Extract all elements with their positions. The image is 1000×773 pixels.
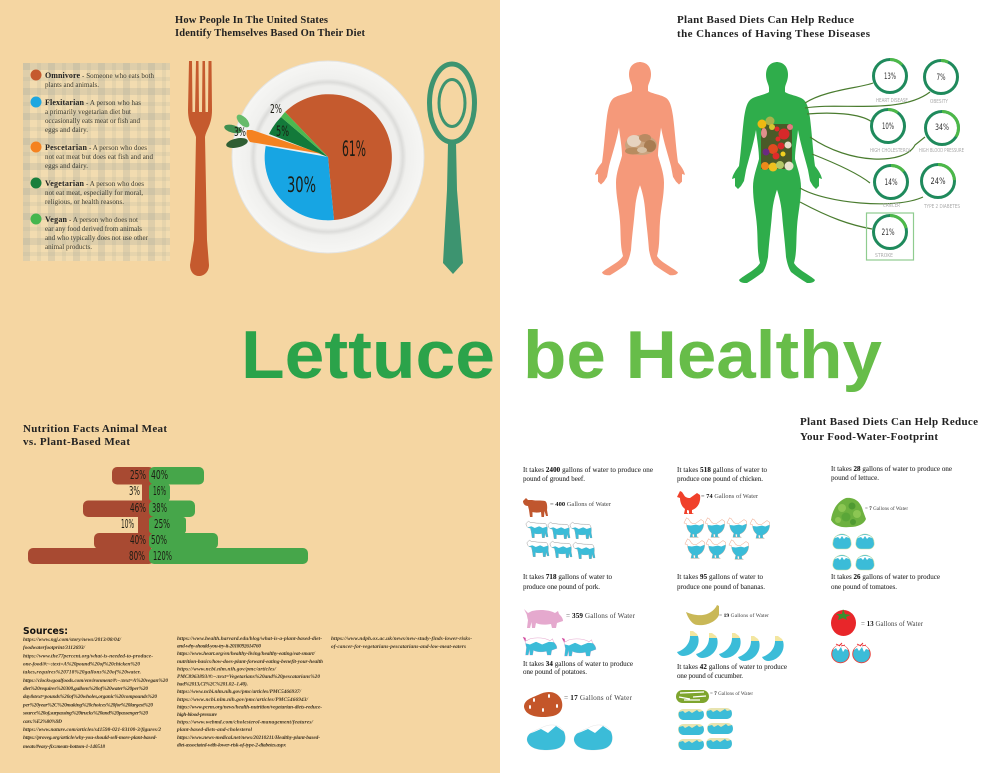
panel: diet legend: religious, or health reasons. [45,198,124,206]
block: tomato water use: one pound of tomatoes. [831,583,897,591]
block: pork water use: produce one pound of pork. [523,583,600,591]
figure: green plant-eating body [732,62,822,283]
sources column 2: https://www.pcrm.org/news/health-nutrition/vegetarian-diets-reduce- [177,704,322,710]
panel: diet legend: - A person who does [89,144,147,152]
heading: water footprint [800,416,978,443]
sources column 2: https://www.health.harvard.edu/blog/what-is-a-plant-based-diet- [177,636,322,642]
block: pork water use: It takes 718 gallons of water to [523,573,612,581]
block: potato water use: It takes 34 gallons of water to produce [523,660,633,668]
bar chart: nutrition comparison: 120% [153,549,172,563]
heading: diet identification: How People In The United States [175,15,328,26]
heading: diet identification: Identify Themselves Based On Their Diet [175,28,366,39]
panel: diet legend: animal products. [45,243,92,251]
block: lettuce water use: It takes 28 gallons of water to produce one [831,465,952,473]
main title [241,317,882,393]
panel: diet legend: and who typically does not use other [45,234,149,242]
right background panel [500,0,1000,773]
pie chart on plate: 2% [270,102,282,116]
sources column 1: day&text=pounds%20of%20wholes,organic%20compounds%20 [23,694,157,700]
stat: high blood pressure: HIGH BLOOD PRESSURE [919,148,964,154]
sources column 2: https://www.ncbi.nlm.nih.gov/pmc/articles/PMC5466943/ [177,697,309,703]
sources column 1: https://clockwgoalfoods.com/environment/#:~:text=A%20vegan%20 [23,678,168,684]
stat: stroke: 21% [882,228,895,238]
bar chart: nutrition comparison: 25% [154,517,170,531]
sources column 2: https://www.webmd.com/cholesterol-management/features/ [177,720,314,726]
panel: diet legend: - Someone who eats both [82,72,154,80]
panel: diet legend [23,63,170,261]
bar chart: nutrition comparison: 3% [129,484,140,498]
block: banana water use: = 19 Gallons of Water [719,612,769,619]
panel: diet legend: eggs and dairy. [45,162,88,170]
bar chart: nutrition comparison [28,467,308,564]
block: banana water use [677,573,784,661]
block: cucumber water use: It takes 42 gallons of water to produce [677,663,787,671]
block: tomato water use: It takes 26 gallons of water to produce [831,573,940,581]
block: potato water use: one pound of potatoes. [523,668,587,676]
block: banana water use: It takes 95 gallons of water to [677,573,764,581]
sources column 1: cars.%E2%80%9D [23,719,62,725]
heading: diet identification [175,15,366,39]
icon: fork [188,61,212,276]
sources column 1: source%20of,surpassing%20trucks%20and%20passenger%20 [22,710,148,716]
sources column 1 [22,637,168,750]
sources column 2: plant-based-diets-and-cholesterol [176,727,253,733]
block: beef water use: It takes 2400 gallons of water to produce one [523,466,653,474]
panel: diet legend: eggs and dairy. [45,126,88,134]
sources column 2: PMC8963893/#:~:text=Vegetarians%20and%20pescatarians%20 [177,674,320,680]
panel: diet legend: - A person who does not [69,216,138,224]
panel: diet legend: Vegetarian [45,179,85,188]
block: chicken water use: produce one pound of chicken. [677,475,763,483]
stat: type 2 diabetes: 24% [930,177,946,187]
heading: diseases [677,14,871,40]
block: lettuce water use: = 7 Gallons of Water [865,507,908,512]
pie chart on plate: 5% [276,124,289,140]
panel: diet legend: Flexitarian [45,98,85,107]
block: tomato water use: = 13 Gallons of Water [861,621,924,628]
heading: water footprint: Your Food-Water-Footprint [800,431,938,443]
heading: water footprint: Plant Based Diets Can Help Reduce [800,416,978,428]
sources column 2: https://www.ncbi.nlm.nih.gov/pmc/articles/PMC5466937/ [177,689,302,695]
panel: diet legend: Omnivore [45,71,80,80]
stat: obesity: OBESITY [930,99,949,105]
panel: diet legend: - A person who has [86,99,141,107]
sources column 1: https://www.ngj.com/story/news/2013/08/04/ [23,637,122,643]
panel: diet legend: plants and animals. [45,81,99,89]
block: pork water use: = 359 Gallons of Water [566,612,636,620]
panel: diet legend: not eat meat, especially for moral, [45,189,143,197]
main title: Lettuce [241,317,495,393]
stat: cancer: CANCER [883,203,900,209]
block: lettuce water use: pound of lettuce. [831,474,879,482]
panel: diet legend: Vegan [45,215,68,224]
block: cucumber water use [676,663,787,750]
block: beef water use: = 400 Gallons of Water [550,501,612,508]
sources column 2: nutrition-basics/how-does-plant-forward-eating-benefit-your-health [177,659,323,665]
sources column 1: https://www.nature.com/articles/s41598-021-83100-3/figures/2 [23,727,161,733]
block: cucumber water use: one pound of cucumber. [677,672,743,680]
sources column 1: meats/#easy-fix:meats-bottom-1-140518 [23,744,105,750]
sources column 2: https://www.news-medical.net/news/20210211/Healthy-plant-based- [177,735,320,741]
bar chart: nutrition comparison: 50% [151,533,167,547]
panel: diet legend: not eat meat but does eat fish and and [45,153,154,161]
block: tomato water use [831,573,940,663]
stat: heart disease [874,60,908,104]
pie chart on plate: 3% [234,125,246,139]
heading: diseases: Plant Based Diets Can Help Reduce [677,14,854,26]
bar chart: nutrition comparison: 38% [152,501,167,515]
stat: stroke: STROKE [875,253,893,259]
sources column 1: foodwaterfootprint/3112693/ [23,645,86,651]
block: chicken water use: It takes 518 gallons of water to [677,466,768,474]
left background panel [0,0,500,773]
bar chart: nutrition comparison: 16% [153,484,166,498]
bar chart: nutrition comparison: 40% [151,468,168,482]
heading: nutrition facts: Nutrition Facts Animal Meat [23,423,167,435]
stat: cancer: 14% [884,178,898,188]
stat: high cholesterol [870,110,911,154]
sources column 2: high-blood-pressure [177,712,218,718]
sources column 3: https://www.ndph.ox.ac.uk/news/new-study-finds-lower-risks- [331,636,472,642]
stat: stroke [866,213,914,260]
icon: spoon [430,64,474,274]
panel: diet legend: ear any food derived from animals [45,225,142,233]
pie chart on plate: 61% [342,137,366,161]
sources heading: Sources: [23,626,68,637]
stat: obesity: 7% [936,73,946,83]
stat: high blood pressure [919,112,964,154]
stat: type 2 diabetes: TYPE 2 DIABETES [923,204,960,210]
panel: diet legend: occasionally eats meat or fish and [45,117,140,125]
stat: cancer [874,166,908,209]
stat: heart disease: HEART DISEASE [876,98,908,104]
block: banana water use: produce one pound of bananas. [677,583,765,591]
block: cucumber water use: = 7 Gallons of Water [710,692,753,697]
sources column 3: of-cancer-for-vegetarians-pescatarians-and-low-meat-eaters [331,644,466,650]
stat: high cholesterol: 10% [882,122,894,132]
bar chart: nutrition comparison: 80% [129,549,145,563]
sources column 2: and-why-should-you-try-it-2018092614760 [177,644,261,650]
panel: diet legend: a primarily vegetarian diet but [45,108,131,116]
bar chart: nutrition comparison: 10% [121,517,134,531]
sources column 2: diet-associated-with-lower-risk-of-type-2-diabetes.aspx [177,742,286,748]
heading: nutrition facts: vs. Plant-Based Meat [23,436,130,448]
panel: diet legend: - A person who does [86,180,144,188]
sources column 1: takes,requires%20718%20gallons%20of%20water. [23,670,141,676]
stat: type 2 diabetes [922,164,960,210]
block: beef water use [523,466,653,559]
block: chicken water use: = 74 Gallons of Water [701,493,758,500]
bar chart: nutrition comparison: 25% [130,468,146,482]
bar chart: nutrition comparison: 40% [130,533,146,547]
block: potato water use [523,660,633,750]
block: potato water use: = 17 Gallons of Water [564,693,633,702]
figure: orange meat-eating body [595,62,685,275]
block: lettuce water use [831,465,952,570]
sources column 3 [331,636,472,650]
stat: heart disease: 13% [884,72,896,82]
sources column 1: https://proveg.org/article/why-you-should-sell-more-plant-based- [23,735,157,741]
stat: high blood pressure: 34% [935,123,949,133]
sources column 2: https://www.heart.org/en/healthy-living/healthy-eating/eat-smart/ [177,651,316,657]
stat: obesity [924,60,958,105]
block: pork water use [523,573,636,656]
panel: diet legend: Pescetarian [45,143,88,152]
heading: nutrition facts [23,423,167,448]
sources column 1: diet%20requires%20300,gallons%20of%20water%20per%20 [23,686,148,692]
main title: be Healthy [523,317,882,393]
heading: diseases: the Chances of Having These Diseases [677,28,871,40]
sources column 1: https://www.the77percent.org/what-is-needed-to-produce- [23,654,153,660]
block: chicken water use [677,466,770,559]
stat: high cholesterol: HIGH CHOLESTEROL [870,148,911,154]
block: beef water use: pound of ground beef. [523,475,585,483]
pie chart on plate: 30% [287,173,316,197]
sources column 1: per%20year%2C%20making%20choices%20for%20largest%20 [22,702,153,708]
sources column 2: had%2013,CI%2C%201.02–1.40). [177,681,248,688]
sources column 2: https://www.ncbi.nlm.nih.gov/pmc/articles/ [177,666,277,672]
bar chart: nutrition comparison: 46% [130,501,146,515]
sources column 1: one-food/#:~:text=A%20pound%20of%20chicken%20 [23,662,140,668]
pie chart on plate [223,61,424,253]
sources column 2 [176,636,323,748]
connector lines [800,83,930,229]
